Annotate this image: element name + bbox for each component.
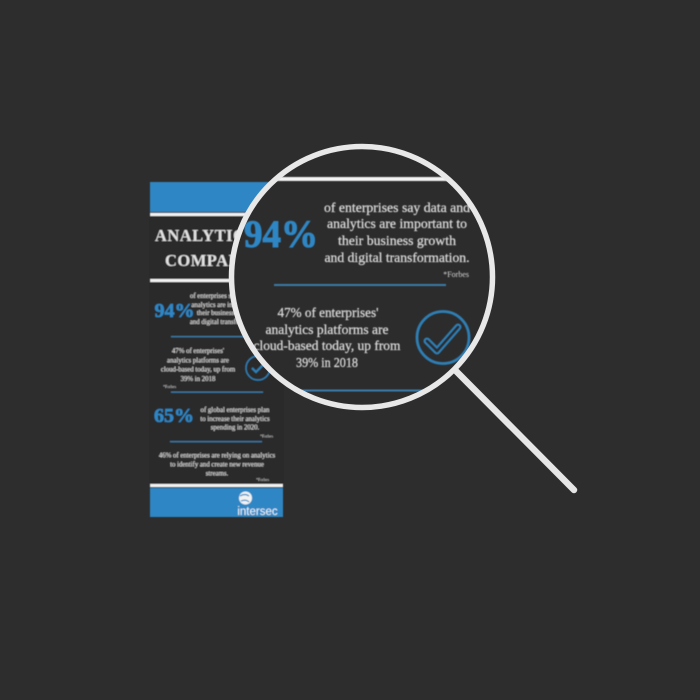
icon: small check	[246, 356, 270, 380]
magnifier lens	[225, 146, 500, 408]
heading	[155, 226, 279, 270]
stat: 47%: analytics platforms are	[167, 358, 229, 364]
stat: 94%: and digital transformation.	[190, 319, 262, 326]
stat: 46%: streams.	[206, 470, 229, 478]
magnified stat: 47%	[254, 305, 401, 370]
stat: 47%: 39% in 2018	[181, 376, 216, 383]
stat: 65%: *Forbes	[260, 434, 273, 438]
magnified stat: 94%: 94%	[244, 213, 318, 256]
top blue banner	[150, 182, 283, 212]
magnified stat: 47%: 47% of enterprises'	[278, 305, 378, 320]
panel: infographic document	[150, 182, 283, 518]
stat: 46%: to identify and create new revenue	[170, 462, 264, 468]
magnified stat: 94%: of enterprises say data and	[324, 200, 470, 215]
stat: 65%: to increase their analytics	[200, 416, 270, 423]
footer banner with logo	[150, 484, 283, 518]
magnified stat: 94%	[244, 200, 470, 279]
magnified stat: 94%: *Forbes	[443, 270, 469, 279]
stat: 94%	[154, 293, 263, 326]
stat: 65%: of global enterprises plan	[201, 407, 270, 414]
stat: 65%: 65%	[154, 405, 194, 427]
magnifier handle	[455, 370, 574, 490]
magnified stat: 94%: analytics are important to	[327, 216, 467, 231]
icon: large check	[417, 312, 469, 364]
document background	[150, 182, 283, 517]
magnifier ring	[232, 146, 492, 408]
stat: 65%	[154, 405, 273, 438]
stat: 94%: 94%	[154, 300, 194, 322]
magnifier infographic	[149, 144, 578, 518]
magnified stat: 47%: 39% in 2018	[296, 355, 358, 370]
stat: 46%: 46% of enterprises are relying on analytics	[159, 452, 275, 460]
stat: 94%: of enterprises say data and	[190, 293, 263, 300]
stat: 47%: 47% of enterprises'	[172, 348, 224, 355]
stat: 47%	[161, 348, 236, 389]
heading: ANALYTICS IN	[155, 226, 279, 245]
magnified content	[244, 176, 471, 392]
heading: COMPANIES	[165, 251, 269, 270]
magnified stat: 94%: their business growth	[338, 233, 456, 248]
stat: 47%: cloud-based today, up from	[161, 366, 236, 374]
magnified stat: 94%: and digital transformation.	[324, 250, 470, 265]
stat: 94%: their business growth	[197, 310, 256, 317]
magnified stat: 47%: analytics platforms are	[266, 322, 389, 337]
stat: 46%: *Forbes	[256, 477, 269, 482]
stat: 47%: *Forbes	[163, 384, 176, 389]
magnified stat: 47%: cloud-based today, up from	[254, 338, 401, 353]
stat: 46%	[159, 452, 275, 482]
stat: 65%: spending in 2020.	[211, 424, 260, 432]
stat: 94%: analytics are important to	[191, 302, 261, 309]
footer banner with logo: intersec	[237, 506, 278, 518]
